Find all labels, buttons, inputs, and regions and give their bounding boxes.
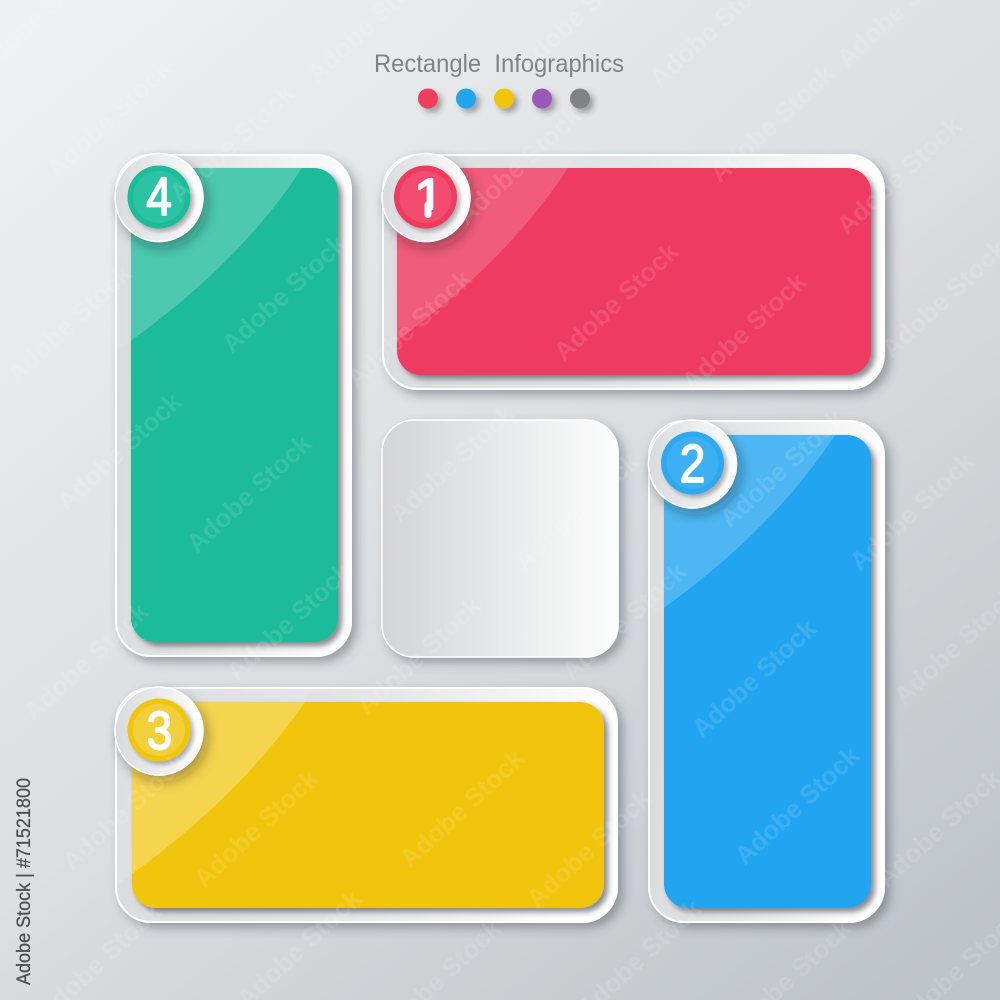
watermark overlay: Adobe Stock bbox=[676, 266, 813, 397]
frame highlight 1 bbox=[381, 154, 578, 352]
colour panel 2 bbox=[664, 435, 871, 908]
panel: card 1 red bbox=[381, 154, 884, 389]
frame highlight 3 bbox=[115, 687, 312, 886]
watermark overlay: Adobe Stock bbox=[181, 428, 318, 559]
badge 3: 3 bbox=[147, 701, 172, 761]
watermark overlay: Adobe Stock bbox=[216, 228, 353, 359]
watermark overlay: Adobe Stock bbox=[548, 236, 685, 367]
badge 2: 2 bbox=[680, 434, 705, 494]
watermark overlay: Adobe Stock bbox=[384, 398, 521, 529]
watermark overlay: Adobe Stock bbox=[844, 446, 981, 577]
watermark overlay: Adobe Stock bbox=[729, 740, 866, 871]
panel: card 4 green bbox=[115, 154, 351, 656]
frame highlight 4 bbox=[115, 154, 312, 352]
badge 1: 1 bbox=[414, 168, 444, 228]
colour panel 1 bbox=[397, 168, 871, 375]
badge 4 bbox=[115, 154, 203, 242]
colour dots row bbox=[418, 88, 590, 108]
watermark overlay: Adobe Stock bbox=[451, 100, 588, 231]
watermark overlay: Adobe Stock bbox=[704, 58, 841, 189]
watermark overlay: Adobe Stock bbox=[341, 263, 478, 394]
panel: card 3 yellow bbox=[115, 687, 617, 922]
watermark overlay: Adobe Stock bbox=[188, 763, 325, 894]
watermark overlay: Adobe Stock bbox=[18, 596, 155, 727]
badge 3 bbox=[115, 687, 203, 775]
stock id caption: Adobe Stock | #71521800 bbox=[14, 778, 35, 985]
frame 3 bbox=[116, 688, 617, 922]
watermark overlay: Adobe Stock bbox=[1, 258, 138, 389]
watermark overlay: Adobe Stock bbox=[556, 556, 693, 687]
badge 4: 4 bbox=[146, 167, 172, 227]
watermark overlay: Adobe Stock bbox=[521, 783, 658, 914]
watermark overlay: Adobe Stock bbox=[221, 556, 358, 687]
watermark overlay: Adobe Stock bbox=[56, 746, 193, 877]
frame 1 bbox=[383, 155, 884, 389]
watermark overlay: Adobe Stock bbox=[831, 110, 968, 241]
glass highlight 4 bbox=[131, 168, 302, 340]
watermark overlay: Adobe Stock bbox=[394, 743, 531, 874]
title: Rectangle Infographics bbox=[374, 50, 624, 78]
watermark overlay: Adobe Stock bbox=[164, 78, 301, 209]
watermark overlay: Adobe Stock bbox=[41, 53, 178, 184]
glass highlight 1 bbox=[397, 168, 568, 340]
watermark overlay: Adobe Stock bbox=[714, 403, 851, 534]
watermark overlay: Adobe Stock bbox=[51, 386, 188, 517]
panel: centre grey square bbox=[382, 420, 618, 657]
watermark overlay: Adobe Stock bbox=[351, 590, 488, 721]
panel: card 2 blue bbox=[648, 420, 884, 922]
colour panel 3 bbox=[132, 702, 604, 908]
watermark overlay: Adobe Stock bbox=[686, 613, 823, 744]
watermark overlay: Adobe Stock bbox=[509, 446, 646, 577]
glass highlight 3 bbox=[132, 702, 305, 874]
badge 2 bbox=[648, 420, 736, 508]
colour panel 4 bbox=[131, 168, 338, 642]
glass highlight 2 bbox=[664, 435, 835, 608]
frame highlight 2 bbox=[648, 420, 845, 619]
frame 2 bbox=[649, 421, 884, 922]
frame 4 bbox=[116, 155, 351, 656]
badge 1 bbox=[382, 154, 470, 242]
